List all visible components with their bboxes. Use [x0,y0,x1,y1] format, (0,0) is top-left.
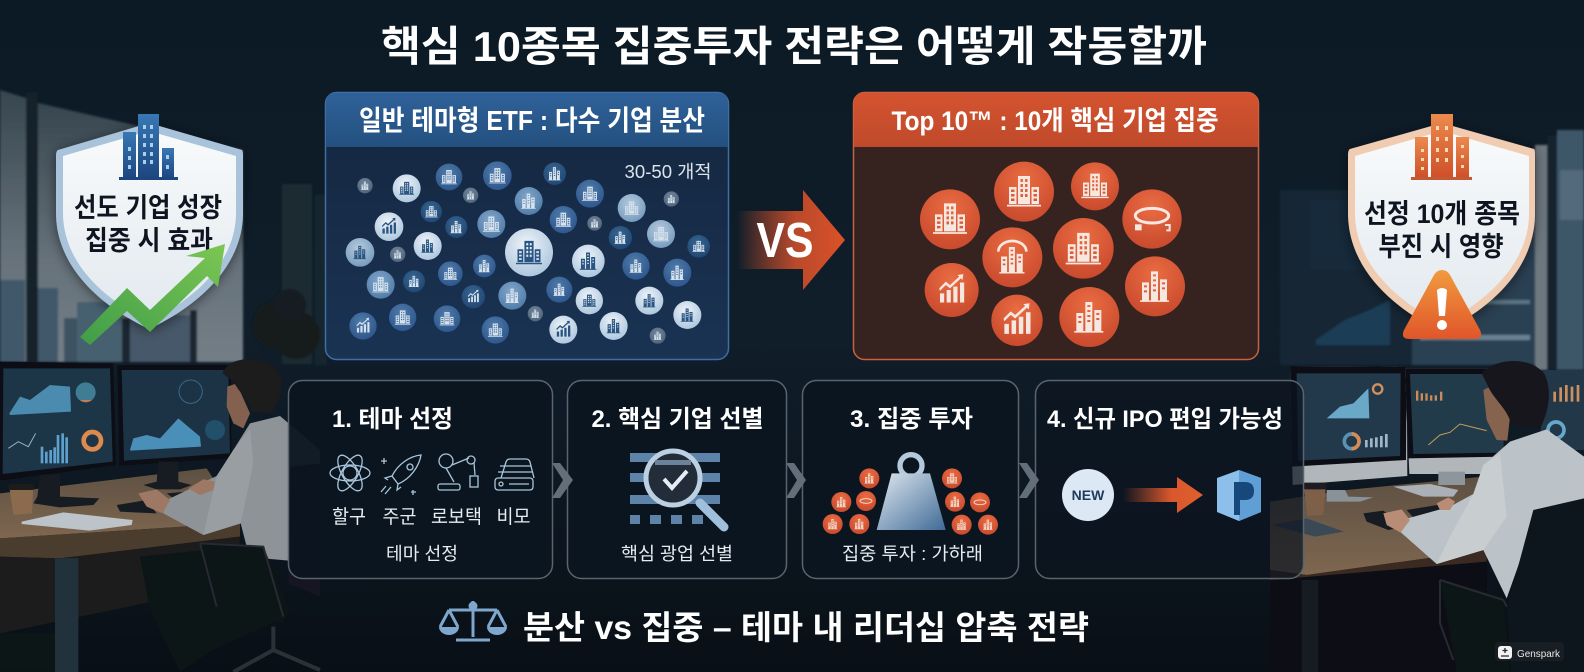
theme labels: 비모 [496,506,530,528]
process steps [288,380,1304,578]
watermark: Genspark [1495,642,1564,661]
icon: blue buildings [119,114,178,180]
icon: atom [330,452,370,494]
step 3 heading: 3. 집중 투자 [850,406,973,433]
left workstation with man [0,359,320,672]
arrow: VS [737,190,845,290]
shield text [74,193,222,256]
logo [1498,646,1512,659]
VS label: VS [756,214,814,268]
icon: rocket [381,455,421,495]
shield text: 부진 시 영향 [1378,232,1504,262]
icon: orange buildings [1411,114,1472,180]
shield text [1364,199,1520,262]
shield: leading company growth [56,114,243,345]
shield body [1348,123,1535,332]
step 2: core company selection [568,380,786,578]
shield text: 집중 시 효과 [85,226,213,256]
wordmark: Genspark [1517,648,1561,660]
icon: robot arm [438,454,478,490]
step 2 heading: 2. 핵심 기업 선별 [592,406,764,433]
company bubbles [346,161,710,344]
shield: impact of underperformance [1348,114,1535,339]
panel: Top 10 concentrated [854,92,1258,360]
panel header [854,93,1258,147]
panel: diversified thematic ETF [326,92,728,360]
theme labels [332,506,530,528]
count label: 30-50 개적 [624,162,712,182]
arrow: new to portfolio [1123,477,1203,513]
step 1 heading: 1. 테마 선정 [332,406,453,433]
icon: weight with companies [823,455,998,535]
icon: green rising arrow [80,244,225,345]
step 3 caption: 집중 투자 : 가하래 [842,544,983,564]
right workstation with man [1270,361,1584,672]
arrow chevrons between steps [552,463,1039,498]
icon: NEW badge: NEW [1072,487,1105,503]
shield body [56,123,243,329]
step 3: concentrated investment [802,380,1018,578]
shield text: 선정 10개 종목 [1364,199,1520,229]
step 4 heading: 4. 신규 IPO 편입 가능성 [1047,406,1283,433]
shield text: 선도 기업 성장 [74,193,222,223]
panel header [326,93,728,147]
header text: 일반 테마형 ETF : 다수 기업 분산 [359,105,705,136]
header text: Top 10™ : 10개 핵심 기업 집중 [892,106,1218,136]
summary text: 분산 vs 집중 – 테마 내 리더십 압축 전략 [523,609,1089,646]
step 4: new IPO inclusion [1036,380,1304,578]
step 1: theme selection [288,380,552,578]
step 2 caption: 핵심 광업 선별 [621,544,733,564]
icon: P hexagon [1217,470,1261,521]
icon: balance scale [439,601,507,640]
title: 핵심 10종목 집중투자 전략은 어떻게 작동할까 [381,23,1207,70]
theme labels: 로보택 [431,506,482,528]
left office windows [0,90,327,365]
icon: NEW badge [1062,469,1114,521]
theme labels: 할구 [332,506,366,528]
icon: storage drive [495,459,534,490]
right office wall and windows [1280,130,1584,370]
step 1 caption: 테마 선정 [386,544,458,564]
icon: magnifier with check [630,451,724,527]
icon: warning triangle [1403,270,1481,339]
company bubbles [920,162,1185,347]
theme labels: 주군 [382,507,416,528]
